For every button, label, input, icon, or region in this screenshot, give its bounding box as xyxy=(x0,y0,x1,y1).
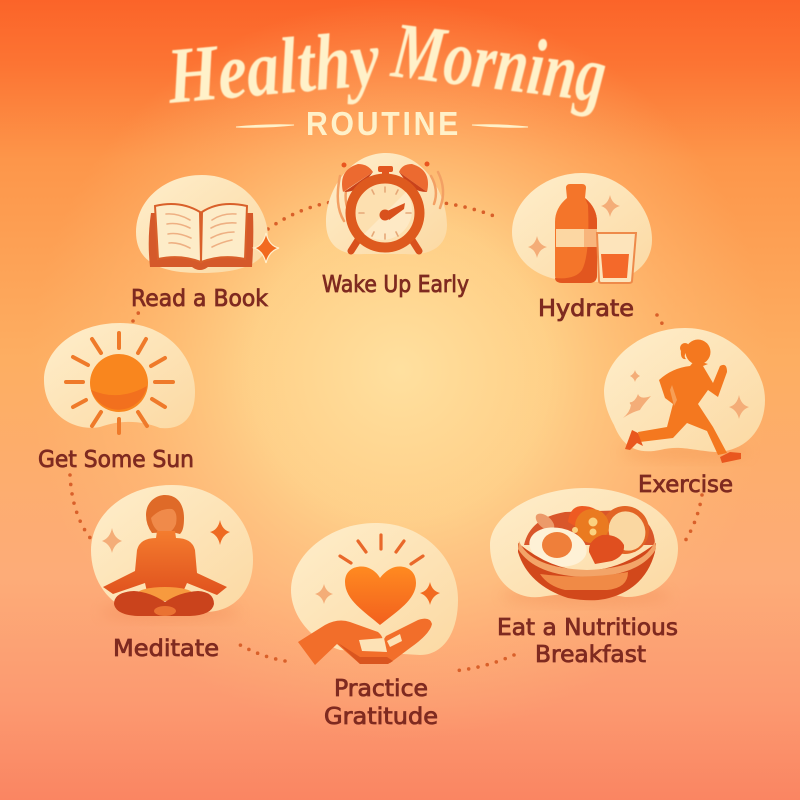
title: Morning xyxy=(386,6,611,120)
label: Meditate xyxy=(113,636,219,662)
step: exercise xyxy=(604,328,765,498)
step: hydrate xyxy=(512,173,652,322)
blob: gratitude background xyxy=(291,523,458,655)
step: meditate xyxy=(91,485,253,662)
icon: sparkles xyxy=(102,520,230,553)
label xyxy=(324,676,438,730)
icon: sparkle xyxy=(254,233,279,263)
icon: runner xyxy=(625,340,741,463)
blob: meditate background xyxy=(91,485,253,612)
icon: glass xyxy=(597,233,636,283)
blob: sun background xyxy=(44,323,195,428)
blob: book background xyxy=(136,175,268,273)
connector dots xyxy=(70,202,702,671)
shadow xyxy=(100,604,240,620)
blob: clock background xyxy=(326,153,447,254)
step: get some sun xyxy=(38,323,195,473)
title xyxy=(163,6,611,121)
icon: bottle xyxy=(555,184,597,283)
label: Exercise xyxy=(638,472,733,498)
icon: heart xyxy=(345,566,416,625)
label: Gratitude xyxy=(324,704,438,730)
icon: open book xyxy=(149,204,253,270)
blob: hydrate background xyxy=(512,173,652,282)
icon: sparkles xyxy=(528,195,620,258)
label: Read a Book xyxy=(131,286,269,312)
label xyxy=(497,615,678,668)
step: read a book xyxy=(131,175,279,312)
subtitle: routine: ROUTINE xyxy=(306,105,461,142)
icon: open hand xyxy=(298,619,432,665)
blob: exercise background xyxy=(604,328,765,452)
shadow xyxy=(501,588,671,604)
step: wake up early xyxy=(322,153,469,298)
title: Healthy xyxy=(163,15,383,121)
label: Eat a Nutritious xyxy=(497,615,678,641)
label: Wake Up Early xyxy=(322,272,469,298)
label: Breakfast xyxy=(535,642,646,668)
icon: light rays xyxy=(340,535,423,564)
shadow xyxy=(620,444,750,460)
step: eat a nutritious breakfast xyxy=(490,488,678,668)
icon: meditating figure xyxy=(103,495,227,616)
icon: alarm clock xyxy=(338,162,443,251)
icon: sparkles xyxy=(315,582,440,605)
icon: food bowl xyxy=(518,505,656,600)
blob: breakfast background xyxy=(490,488,678,597)
label: Hydrate xyxy=(538,296,634,322)
step: practice gratitude xyxy=(291,523,458,730)
label: Get Some Sun xyxy=(38,447,194,473)
icon: sparkles xyxy=(623,370,749,419)
icon: sun xyxy=(66,333,173,433)
label: Practice xyxy=(334,676,428,702)
